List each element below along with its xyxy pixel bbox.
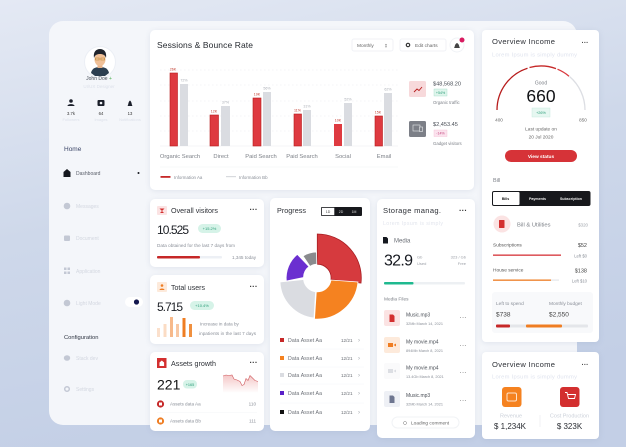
cost production: Cost Production bbox=[550, 414, 589, 420]
subscriptions row: Subscriptions bbox=[493, 242, 522, 248]
nav: dashboard: Dashboard bbox=[76, 171, 101, 177]
legend rows: Data Asset Aa bbox=[288, 373, 322, 379]
bar chart: 11% bbox=[294, 108, 302, 112]
heading: Storage manag. bbox=[383, 206, 441, 215]
budget box: $2,550 bbox=[549, 312, 569, 318]
budget box: Monthly budget bbox=[549, 301, 582, 307]
file: movie orange bbox=[384, 337, 466, 353]
menu dots: ··· bbox=[459, 206, 467, 215]
bill tabs: Subscription bbox=[560, 197, 582, 201]
house service row: Left $10 bbox=[572, 278, 588, 284]
last update bbox=[525, 126, 557, 140]
row: assets data bb: 111 bbox=[249, 418, 256, 424]
subtitle: Lorem Ipsum is simply bbox=[383, 221, 443, 227]
nav: messages: Messages bbox=[76, 204, 99, 210]
nav: application: Application bbox=[76, 269, 101, 275]
area line chart bbox=[223, 375, 258, 393]
loading comment button: Loading comment bbox=[411, 420, 450, 426]
bill heading: Bill bbox=[493, 178, 500, 184]
media heading bbox=[383, 237, 411, 244]
row: assets data bb: Assets data Bb bbox=[170, 418, 201, 424]
gauge bbox=[497, 66, 585, 110]
monthly dropdown: ⇕ bbox=[384, 44, 388, 50]
file: movie orange: 894Mb March 8, 2021 bbox=[406, 349, 443, 353]
file: music bbox=[384, 310, 466, 326]
icon bbox=[157, 206, 167, 215]
bar chart: 72% bbox=[180, 78, 188, 82]
row: assets data aa: 110 bbox=[249, 402, 256, 406]
bar chart: 26K bbox=[170, 68, 177, 72]
file: movie orange: ··· bbox=[460, 342, 466, 350]
house service row bbox=[493, 268, 588, 284]
panel: total users bbox=[150, 275, 264, 344]
stat: notifications bbox=[119, 100, 141, 122]
file: music: Music.mp3 bbox=[406, 312, 430, 318]
stat: followers: 3.7k bbox=[67, 111, 76, 116]
menu dots: ··· bbox=[250, 282, 258, 291]
growth badge: +10.4% bbox=[195, 303, 209, 308]
nav: document: Document bbox=[76, 236, 99, 242]
legend bbox=[160, 175, 268, 180]
stat: followers: Followers bbox=[62, 117, 80, 122]
storage used: Used bbox=[417, 261, 426, 266]
growth badge: +15.2% bbox=[203, 226, 217, 231]
view status button: View status bbox=[528, 154, 554, 160]
menu dots: ··· bbox=[582, 40, 588, 47]
subtitle: Lorem Ipsum is simply dummy bbox=[492, 374, 577, 380]
subscriptions row: Left $0 bbox=[574, 254, 588, 258]
bill and utilities row: $320 bbox=[578, 222, 589, 228]
file: music gray: 32Mb March 14, 2021 bbox=[406, 402, 443, 406]
nav: application bbox=[64, 268, 101, 275]
bar chart: Paid Search bbox=[286, 154, 318, 160]
heading: Sessions & Bounce Rate bbox=[157, 40, 253, 50]
user name: John Doe + bbox=[86, 76, 112, 82]
panel: assets growth bbox=[150, 352, 264, 431]
panel: storage management bbox=[377, 199, 475, 438]
monthly dropdown: Monthly bbox=[357, 43, 374, 49]
heading: Overview Income bbox=[492, 360, 555, 369]
bar chart: 12K bbox=[211, 110, 218, 114]
row: assets data bb bbox=[157, 417, 256, 425]
row: assets data aa: Assets data Aa bbox=[170, 402, 201, 406]
file: movie gray bbox=[384, 363, 466, 379]
avatar bbox=[84, 46, 116, 78]
stat: images bbox=[94, 100, 108, 122]
description: inpatients in the last 7 days bbox=[199, 331, 257, 336]
legend rows: Data Asset Aa bbox=[288, 391, 322, 397]
menu dots: ··· bbox=[250, 205, 258, 214]
stat: organic traffic: +54% bbox=[436, 91, 446, 95]
user role: UI/UX Designer bbox=[83, 84, 115, 89]
legend rows: › bbox=[358, 356, 360, 362]
bar chart: 31% bbox=[303, 104, 311, 108]
house service row: House service bbox=[493, 268, 524, 274]
period toggle bbox=[321, 207, 362, 216]
nav: stack dev bbox=[64, 355, 98, 362]
period toggle: 1M bbox=[352, 210, 357, 214]
legend rows: 12/21 bbox=[341, 410, 353, 415]
bar chart: 62% bbox=[384, 88, 392, 92]
stat: gadget visitors: $2,453.45 bbox=[433, 122, 458, 128]
bill and utilities row: Bill & Utilities bbox=[517, 222, 551, 228]
gauge labels: 400 bbox=[495, 118, 503, 122]
budget box: Left to spend bbox=[496, 301, 524, 307]
row: assets data aa bbox=[157, 400, 256, 408]
bar chart: 56% bbox=[263, 86, 271, 90]
legend rows: › bbox=[358, 338, 360, 344]
bill tabs: Bills bbox=[502, 197, 509, 201]
main background panel bbox=[49, 21, 577, 425]
stat: images: 64 bbox=[99, 111, 104, 116]
legend rows: Data Asset Aa bbox=[288, 410, 322, 416]
progress bar bbox=[157, 256, 222, 258]
heading: Overall visitors bbox=[171, 206, 218, 215]
storage used: Gb bbox=[417, 254, 423, 260]
panel: sessions and bounce rate bbox=[150, 30, 474, 190]
heading: home: Home bbox=[64, 146, 82, 153]
storage free: 323 / Gb bbox=[451, 254, 467, 260]
stat: gadget visitors: -14% bbox=[436, 132, 445, 136]
bar chart: Email bbox=[377, 154, 391, 160]
bill and utilities row bbox=[494, 216, 589, 232]
heading: Progress bbox=[277, 206, 306, 215]
nav: messages bbox=[64, 203, 99, 210]
media heading: Media bbox=[394, 238, 411, 244]
loading comment button bbox=[392, 417, 459, 428]
value: 221 bbox=[157, 376, 181, 392]
legend rows: Data Asset Aa bbox=[288, 338, 322, 344]
legend rows: › bbox=[358, 373, 360, 379]
donut chart bbox=[280, 234, 361, 319]
revenue: Revenue bbox=[500, 414, 522, 420]
media files label: Media Files bbox=[384, 296, 409, 302]
period toggle: 2D bbox=[339, 210, 344, 214]
budget box: $738 bbox=[496, 312, 511, 318]
legend: Information Aa bbox=[174, 175, 203, 180]
legend rows: 12/21 bbox=[341, 373, 353, 378]
score bbox=[526, 80, 556, 117]
legend rows: 12/21 bbox=[341, 356, 353, 361]
stat: gadget visitors bbox=[409, 121, 462, 146]
bill tabs bbox=[492, 191, 590, 206]
monthly dropdown bbox=[352, 39, 393, 51]
file: movie gray: My movie.mp4 bbox=[406, 366, 439, 372]
bill tabs: Payments bbox=[529, 197, 546, 201]
description bbox=[199, 322, 257, 336]
file: music: 32Mb March 14, 2021 bbox=[406, 322, 443, 326]
nav: document bbox=[64, 236, 99, 242]
stat: gadget visitors: Gadget visitors bbox=[433, 141, 462, 146]
revenue bbox=[494, 387, 527, 431]
icon bbox=[157, 282, 167, 292]
file: movie gray: ··· bbox=[460, 370, 466, 376]
value: 5.715 bbox=[157, 300, 183, 314]
nav: dashboard bbox=[64, 169, 140, 177]
file: music gray bbox=[384, 391, 466, 407]
storage free: Free bbox=[458, 261, 467, 266]
legend rows: › bbox=[358, 391, 360, 397]
subscriptions row: $52 bbox=[578, 243, 587, 249]
description: Increase in data by bbox=[200, 322, 240, 326]
bar chart: 19K bbox=[254, 92, 261, 96]
bar chart: 37% bbox=[222, 100, 230, 104]
bar chart bbox=[160, 68, 392, 160]
bar chart: 52% bbox=[344, 98, 352, 102]
file: music: ··· bbox=[460, 314, 466, 322]
legend rows: Data Asset Aa bbox=[288, 356, 322, 362]
view status button bbox=[505, 150, 577, 162]
file: movie gray: 13.4Gb March 8, 2021 bbox=[406, 375, 444, 379]
legend rows: 12/21 bbox=[341, 338, 353, 343]
menu dots: ··· bbox=[250, 358, 258, 367]
nav: light mode toggle: Light Mode bbox=[76, 301, 101, 307]
storage used bbox=[384, 252, 426, 270]
stat: organic traffic: $48,568.20 bbox=[433, 82, 461, 88]
stat: images: Images bbox=[94, 117, 108, 122]
subtitle: Lorem Ipsum is simply dummy bbox=[492, 52, 577, 58]
file: movie orange: My movie.mp4 bbox=[406, 340, 439, 346]
growth badge: +165 bbox=[186, 383, 194, 387]
edit charts button: Edit charts bbox=[415, 43, 438, 49]
budget box bbox=[492, 292, 593, 333]
legend: Information Bb bbox=[239, 175, 268, 180]
nav: settings bbox=[65, 387, 95, 393]
stat: organic traffic bbox=[409, 81, 461, 105]
nav: light mode toggle bbox=[64, 297, 143, 307]
panel: overview income and bill bbox=[482, 30, 599, 342]
bar chart: Paid Search bbox=[245, 154, 277, 160]
icon bbox=[157, 358, 166, 368]
storage free bbox=[451, 254, 467, 266]
stat: followers bbox=[62, 99, 80, 122]
file: music gray: ··· bbox=[460, 398, 466, 404]
last update: Last update on bbox=[525, 126, 557, 132]
panel: overall visitors bbox=[150, 199, 264, 267]
storage bar bbox=[384, 282, 465, 284]
heading: configuration: Configuration bbox=[64, 335, 98, 341]
description: Data obtained for the last 7 days from bbox=[157, 243, 235, 248]
panel: progress bbox=[270, 198, 370, 431]
bar chart: Social bbox=[335, 154, 351, 160]
legend rows bbox=[280, 338, 364, 416]
bar chart: 10K bbox=[335, 118, 342, 122]
heading: Overview Income bbox=[492, 37, 555, 46]
period toggle: 1D bbox=[326, 210, 331, 214]
gauge max: 850 bbox=[579, 118, 587, 122]
bar chart: 15K bbox=[375, 110, 382, 114]
storage used: 32.9 bbox=[384, 252, 413, 270]
nav: stack dev: Stack dev bbox=[76, 356, 98, 362]
panel: overview income summary bbox=[482, 352, 599, 439]
stat: notifications: 13 bbox=[128, 111, 133, 116]
score: Good bbox=[535, 80, 547, 86]
score: 660 bbox=[526, 86, 556, 106]
menu dots: ··· bbox=[582, 362, 588, 369]
notification bell bbox=[450, 38, 464, 52]
bar chart: Organic Search bbox=[160, 154, 200, 160]
panel: sidebar bbox=[62, 46, 143, 393]
house service row: $138 bbox=[575, 268, 587, 274]
heading: Assets growth bbox=[171, 359, 216, 368]
edit charts button bbox=[400, 39, 446, 51]
score: +26% bbox=[536, 111, 547, 115]
cost production: $ 323K bbox=[557, 422, 583, 431]
cost production bbox=[550, 387, 589, 431]
legend rows: › bbox=[358, 410, 360, 416]
file: music gray: Music.mp3 bbox=[406, 393, 430, 399]
subscriptions row bbox=[493, 242, 588, 258]
nav: settings: Settings bbox=[76, 387, 95, 393]
mini bar chart bbox=[157, 317, 192, 337]
last update: 20 Jul 2020 bbox=[529, 134, 554, 140]
stat: organic traffic: Organic traffic bbox=[433, 100, 461, 105]
bar chart: Direct bbox=[213, 154, 229, 160]
stat: notifications: Notifications bbox=[119, 117, 141, 122]
revenue: $ 1,234K bbox=[494, 422, 527, 431]
value: 10.525 bbox=[157, 223, 189, 237]
legend rows: 12/21 bbox=[341, 391, 353, 396]
heading: Total users bbox=[171, 283, 205, 292]
today count: 1,345 today bbox=[232, 255, 257, 260]
